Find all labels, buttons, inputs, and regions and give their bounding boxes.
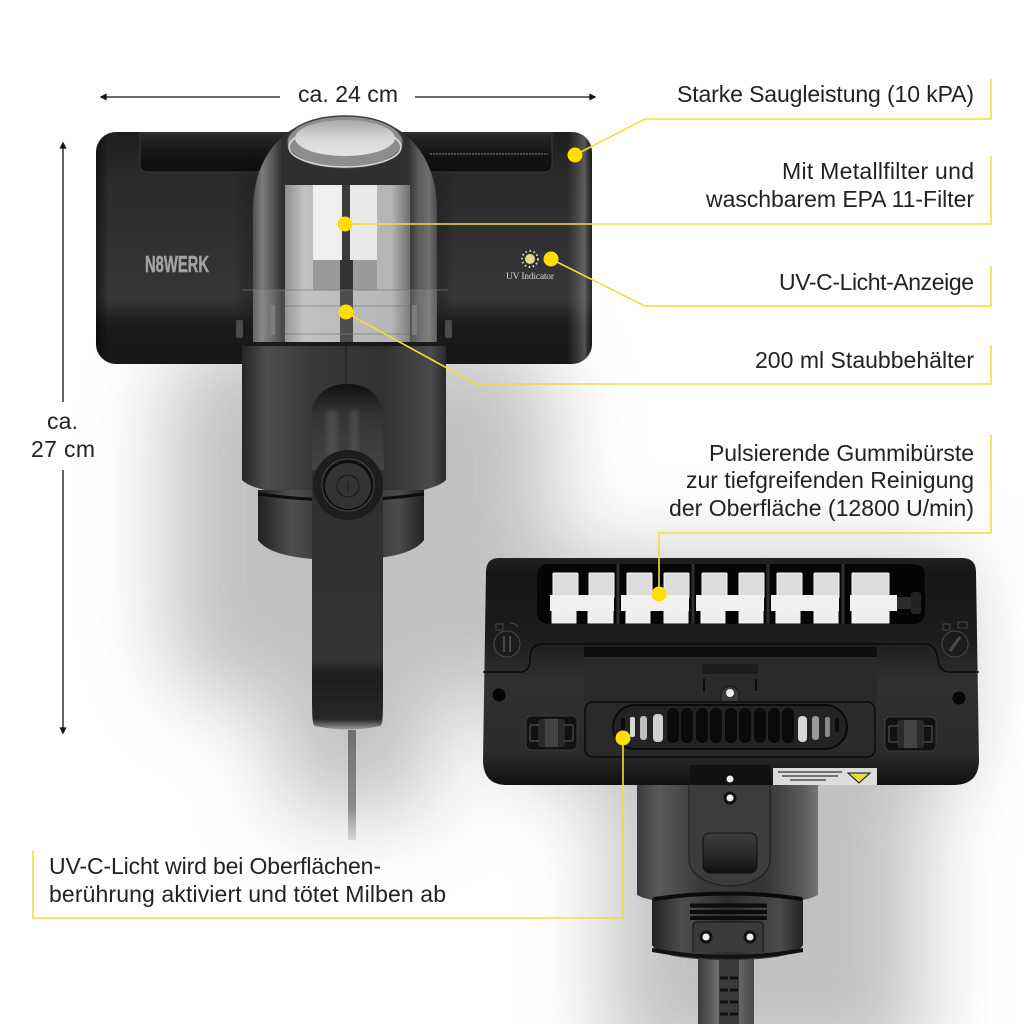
label: zur tiefgreifenden Reinigung: [686, 467, 974, 493]
power button: [313, 450, 383, 520]
height label: 27 cm: [31, 436, 95, 462]
height label: ca.: [47, 408, 78, 434]
marker: [652, 586, 666, 602]
brush core: [550, 595, 897, 611]
marker: [338, 216, 352, 232]
container base ring: [253, 290, 437, 343]
UV indicator: [506, 251, 555, 282]
leader line: [345, 312, 991, 384]
callout: UV-C light: [33, 730, 630, 918]
callout: filter: [338, 156, 991, 232]
label: der Oberfläche (12800 U/min): [669, 495, 974, 521]
side shade behind container: [240, 172, 448, 344]
UV sun icon: [522, 251, 538, 267]
brush dividers: [618, 564, 843, 624]
callout: rubber brush: [652, 435, 991, 602]
handle opening: [311, 384, 384, 470]
label: waschbarem EPA 11-Filter: [705, 186, 974, 212]
leader line: [659, 435, 991, 593]
label: Mit Metallfilter und: [782, 158, 974, 184]
bottom device: underside of floor head: [483, 558, 979, 804]
UV vent frame: [585, 702, 875, 757]
callout: dust container: [338, 304, 991, 384]
height arrow top: [60, 143, 66, 402]
label: Starke Saugleistung (10 kPA): [677, 81, 974, 107]
head body: [483, 558, 979, 785]
connector screws: [700, 930, 756, 944]
head body: [96, 132, 592, 364]
top vent strip: [140, 133, 552, 172]
brush axle: [897, 597, 911, 609]
locks: [494, 622, 968, 657]
lower housing: [242, 345, 446, 496]
soft background shadows: [170, 340, 960, 1024]
lower cylinder: [258, 490, 424, 560]
UV vent: [613, 705, 847, 749]
dust container dome: [236, 116, 452, 346]
width arrow right: [415, 94, 595, 100]
centre plate: [584, 647, 877, 705]
label: Pulsierende Gummibürste: [709, 440, 974, 466]
brand logo: N8WERK: [145, 251, 209, 277]
handle: [312, 384, 383, 730]
warning label: [773, 768, 877, 785]
marker: [544, 252, 558, 266]
inner filter: [285, 185, 410, 343]
hose: [698, 955, 754, 1024]
label: berührung aktiviert und tötet Milben ab: [49, 881, 446, 907]
dimension: height: [31, 143, 95, 733]
leader line: [33, 738, 623, 918]
marker: [616, 730, 630, 746]
UV label: UV Indicator: [506, 272, 555, 282]
bottom device: neck and hose: [637, 770, 818, 1024]
wheel left: [526, 716, 577, 750]
leader line: [575, 79, 991, 155]
brush compartment: [537, 564, 925, 624]
side holes: [492, 688, 506, 702]
connector box: [693, 922, 763, 952]
mount screw: [721, 686, 739, 702]
marker: [338, 304, 354, 320]
leader line: [551, 259, 991, 306]
top device: vacuum top view: [96, 116, 592, 840]
callout: suction: [568, 79, 991, 162]
neck plate: [689, 770, 770, 886]
rubber brush: [552, 573, 889, 623]
height arrow bottom: [60, 470, 66, 733]
label: 200 ml Staubbehälter: [755, 347, 974, 373]
marker: [568, 148, 582, 162]
wheel right: [885, 717, 936, 751]
power cord: [348, 730, 356, 840]
callout: UV light indicator: [544, 252, 991, 306]
lens cap: [287, 116, 403, 168]
width arrow left: [101, 94, 280, 100]
label: UV-C-Licht-Anzeige: [779, 269, 974, 295]
neck cylinder: [637, 780, 818, 905]
neck grille: [690, 906, 767, 918]
width label: ca. 24 cm: [298, 81, 398, 107]
base plate outline: [483, 644, 979, 672]
centre screws: [690, 765, 770, 804]
lower ring: [652, 892, 803, 960]
neck latch: [703, 833, 757, 873]
leader line: [345, 156, 991, 224]
dimension: width: [101, 81, 595, 107]
label: UV-C-Licht wird bei Oberflächen-: [49, 853, 381, 879]
